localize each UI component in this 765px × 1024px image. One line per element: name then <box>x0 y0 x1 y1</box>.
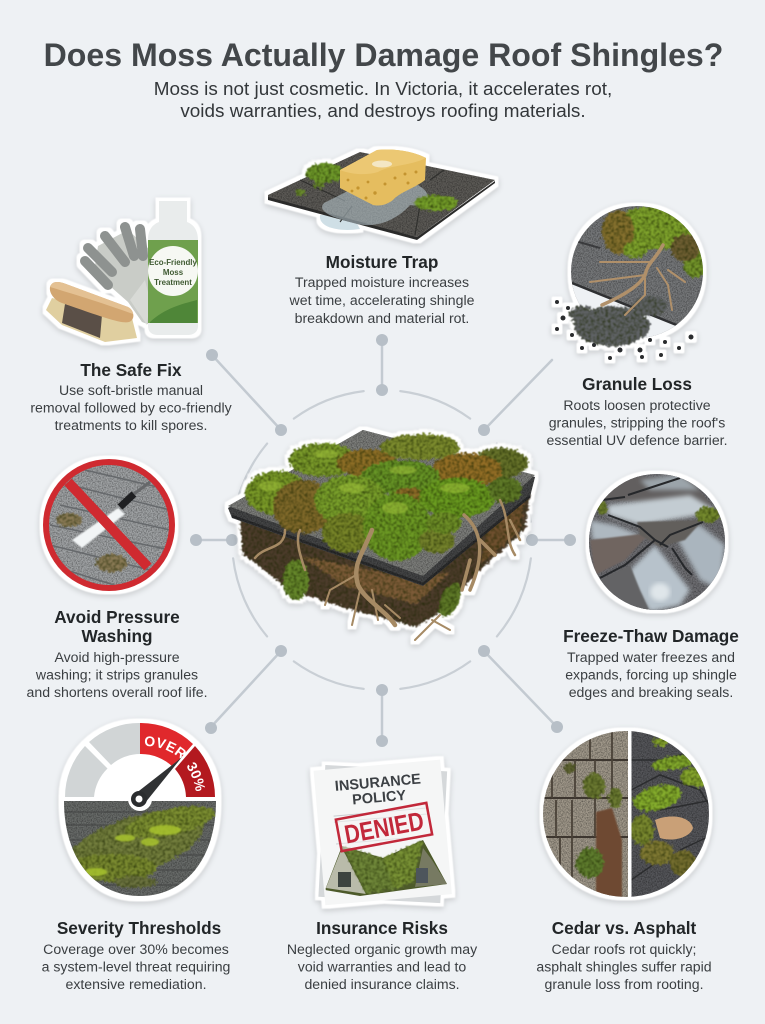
icon: brush, gloves and bottle: Treatment <box>154 278 192 287</box>
hub diagram: connector ring <box>190 334 576 747</box>
panel: granule loss <box>547 200 727 448</box>
panel: the safe fix <box>30 201 233 433</box>
title: Does Moss Actually Damage Roof Shingles? <box>44 37 723 73</box>
heading: Avoid Pressure <box>54 607 180 627</box>
body text: breakdown and material rot. <box>295 310 469 326</box>
moss highlights <box>259 450 470 514</box>
gauge labels: OVER <box>144 736 186 758</box>
panel: freeze-thaw damage <box>563 470 739 700</box>
body text: and shortens overall roof life. <box>27 684 207 700</box>
body text: Coverage over 30% becomes <box>43 941 229 957</box>
body text: Neglected organic growth may <box>287 941 478 957</box>
icon: sponge on shingle <box>268 149 495 240</box>
icon: denied policy document: POLICY <box>352 788 407 808</box>
body text: denied insurance claims. <box>304 976 460 992</box>
roots <box>255 500 520 640</box>
body text: Use soft-bristle manual <box>59 382 203 398</box>
panel: avoid pressure washing <box>27 459 207 700</box>
body text: extensive remediation. <box>65 976 207 992</box>
icon: split cedar and asphalt comparison <box>540 725 714 905</box>
moss clumps <box>245 434 528 620</box>
heading: Granule Loss <box>582 374 692 394</box>
panel: insurance risks <box>287 760 478 992</box>
icon: brush, gloves and bottle: Moss <box>163 268 184 277</box>
body text: Avoid high-pressure <box>54 649 180 665</box>
shingle slab <box>228 430 535 586</box>
icon: brush, gloves and bottle: Eco-Friendly <box>149 258 198 267</box>
icon: brush, gloves and bottle <box>46 201 198 342</box>
body text: Trapped water freezes and <box>567 649 735 665</box>
brush <box>46 282 137 342</box>
panel: severity thresholds <box>42 718 230 992</box>
roots <box>590 245 685 315</box>
denied stamp: DENIED <box>342 805 426 850</box>
panel: cedar vs asphalt <box>536 725 714 992</box>
heading: Cedar vs. Asphalt <box>552 918 697 938</box>
heading: The Safe Fix <box>80 360 182 380</box>
icon: cracked iced shingle <box>585 470 730 615</box>
heading: Moisture Trap <box>326 252 438 272</box>
body text: asphalt shingles suffer rapid <box>536 958 712 974</box>
gloves <box>85 227 150 325</box>
heading: Washing <box>82 626 152 646</box>
subtitle: voids warranties, and destroys roofing materials. <box>180 101 586 122</box>
icon: denied policy document: INSURANCE <box>334 771 422 795</box>
body text: Cedar roofs rot quickly; <box>552 941 696 957</box>
body text: void warranties and lead to <box>298 958 466 974</box>
body text: essential UV defence barrier. <box>547 432 727 448</box>
icon: no pressure washer sign <box>43 459 175 591</box>
body text: granule loss from rooting. <box>544 976 704 992</box>
icon: moss coverage gauge: 30% <box>187 762 205 791</box>
body text: removal followed by eco-friendly <box>30 400 233 416</box>
granule pile <box>569 296 667 346</box>
bottle <box>148 201 198 335</box>
subtitle: Moss is not just cosmetic. In Victoria, it accelerates rot, <box>154 79 612 100</box>
heading: Severity Thresholds <box>57 918 221 938</box>
mossy roof photo <box>64 801 216 896</box>
heading: Freeze-Thaw Damage <box>563 626 739 646</box>
icon: denied policy document <box>314 760 452 905</box>
icon: moss coverage gauge <box>56 718 224 906</box>
body text: granules, stripping the roof's <box>549 414 725 430</box>
icon: roots loosening granules <box>555 200 720 360</box>
central image: mossy shingle cross-section <box>228 430 535 640</box>
panel: moisture trap <box>268 149 495 326</box>
soil block <box>240 480 532 627</box>
body text: Trapped moisture increases <box>295 274 469 290</box>
body text: wet time, accelerating shingle <box>289 292 475 308</box>
heading: Insurance Risks <box>316 918 448 938</box>
body text: a system-level threat requiring <box>42 958 230 974</box>
body text: washing; it strips granules <box>35 666 198 682</box>
mossy house <box>325 840 447 896</box>
body text: edges and breaking seals. <box>569 684 733 700</box>
body text: expands, forcing up shingle <box>565 666 737 682</box>
body text: Roots loosen protective <box>563 397 711 413</box>
gauge needle <box>128 757 182 811</box>
body text: treatments to kill spores. <box>55 417 207 433</box>
loose granules <box>555 300 694 360</box>
